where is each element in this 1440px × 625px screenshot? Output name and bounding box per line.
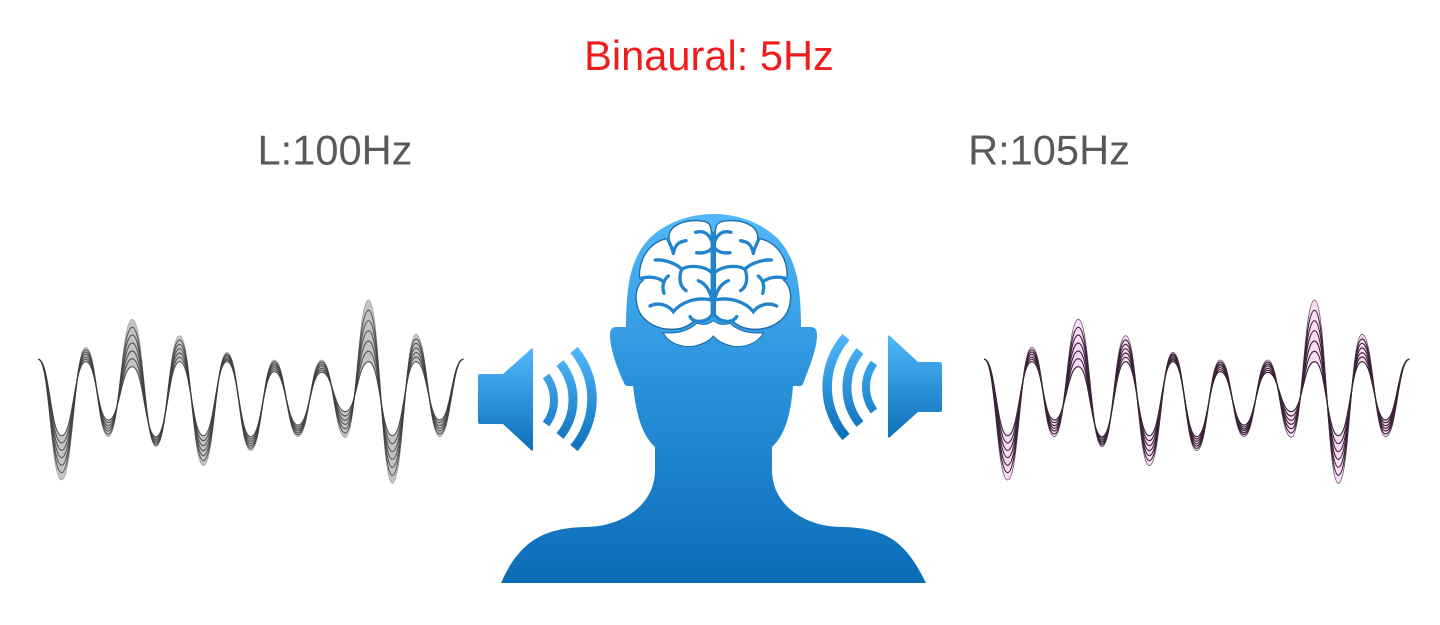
label: left frequency: L:100Hz — [258, 126, 412, 174]
waveform: right ear — [984, 300, 1409, 483]
label: right frequency: R:105Hz — [968, 126, 1130, 174]
icon: left speaker with sound waves — [478, 348, 592, 451]
icon: brain — [636, 221, 791, 347]
waveform: left ear — [38, 300, 463, 483]
icon: right speaker with sound waves — [827, 335, 942, 438]
title: Binaural 5Hz: Binaural: 5Hz — [584, 32, 834, 79]
icon: head silhouette with brain — [501, 214, 926, 583]
